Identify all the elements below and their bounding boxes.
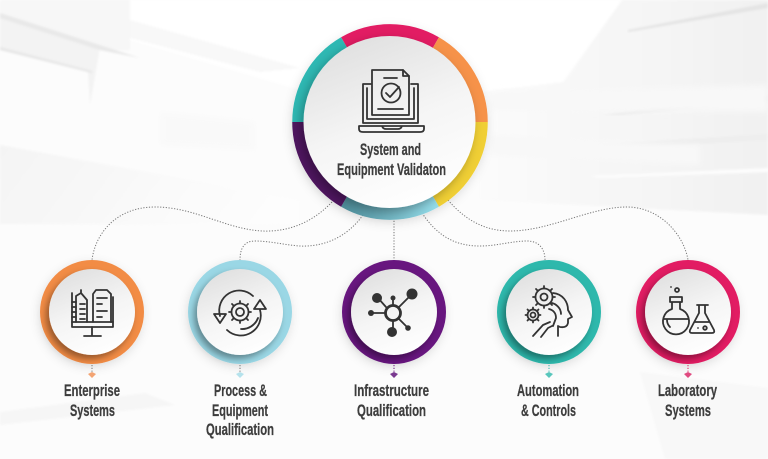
label: Automation [517,382,579,400]
heading [337,141,446,179]
icon: laptop with checked document [359,70,424,132]
label: & Controls [521,402,576,420]
disc [506,269,592,355]
label [658,382,718,420]
ring [497,260,601,364]
stub arrow [545,365,553,378]
node: Process & Equipment Qualification [188,260,292,439]
label: Process & [214,382,267,400]
ring [636,260,740,364]
icon: hub network [368,288,418,337]
label [517,382,579,420]
ring [342,260,446,364]
label: Qualification [206,421,274,439]
icon: head with gears [526,286,572,337]
dotted connectors [92,200,688,260]
heading: Equipment Validaton [337,161,446,179]
label: Laboratory [658,382,718,400]
icon: gear with cycle arrows [214,291,266,335]
node: Infrastructure Qualification [342,260,446,420]
label: Infrastructure [354,382,429,400]
label [354,382,429,420]
disc [645,269,731,355]
icon: buildings on monitor [72,290,113,336]
label: Systems [70,402,115,420]
label: Systems [665,402,711,420]
main disc [304,36,476,208]
node: Automation & Controls [497,260,601,420]
node: Laboratory Systems [636,260,740,420]
label: Qualification [357,402,426,420]
disc [49,269,135,355]
label: Enterprise [64,382,120,400]
label [206,382,274,439]
label: Equipment [212,402,268,420]
label [64,382,120,420]
main circle: System and Equipment Validaton [298,30,482,214]
heading: System and [360,141,421,159]
stub arrow [236,365,244,378]
multicolour ring [298,30,482,214]
ring [188,260,292,364]
stub arrow [88,365,96,378]
node: Enterprise Systems [40,260,144,420]
icon: laboratory flasks [663,286,714,334]
disc [351,269,437,355]
disc [197,269,283,355]
stub arrow [684,365,692,378]
ring [40,260,144,364]
stub arrow [390,365,398,378]
